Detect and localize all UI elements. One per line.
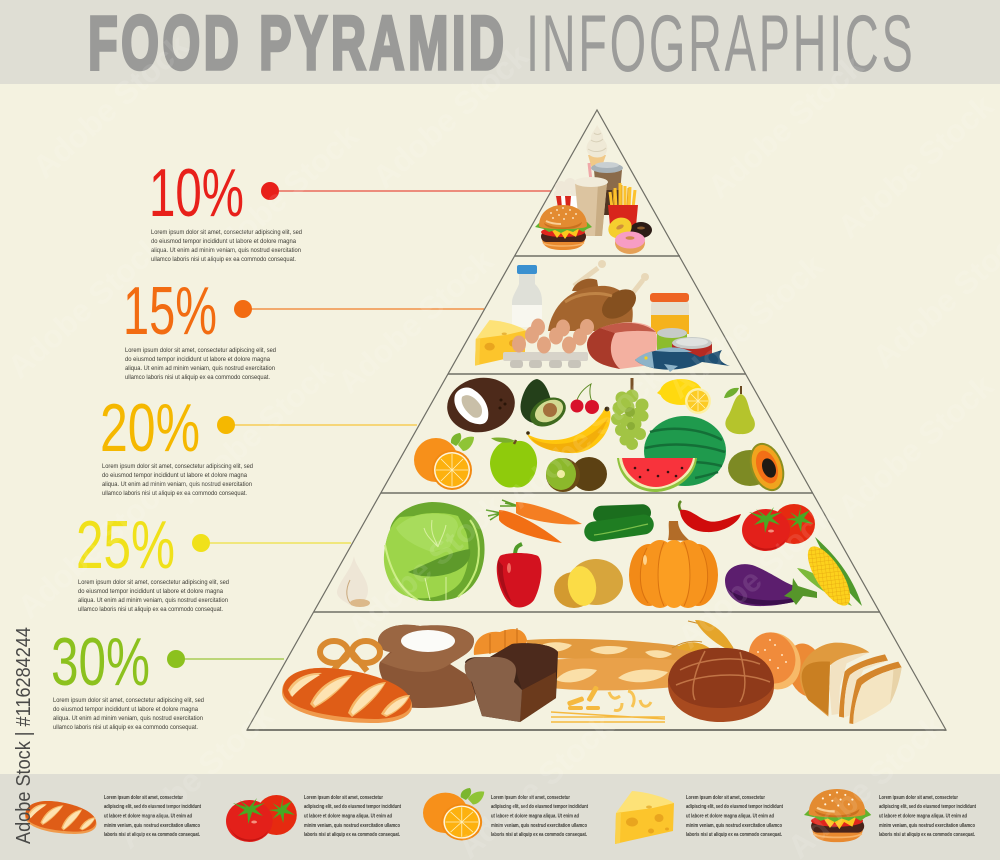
tier: grains and bread: [282, 620, 902, 724]
icon: bell pepper: [497, 544, 541, 607]
icon: garlic: [337, 556, 370, 607]
icon: jar: [650, 293, 689, 334]
label: 10 percent: Lorem ipsum dolor sit amet, consectetur adipiscing elit, sed: [151, 229, 302, 236]
infographic canvas: Adobe Stock: [366, 37, 535, 195]
tier: protein and dairy: [475, 260, 730, 372]
footer item: burger: [804, 789, 976, 842]
label: 25 percent: [76, 507, 229, 613]
infographic canvas: Adobe Stock: [26, 27, 195, 185]
icon: coffee cup: [591, 162, 623, 215]
footer item: tomatoes: minim veniam, quis nostrud exercitation ullamco: [304, 823, 400, 829]
footer item: tomatoes: Lorem ipsum dolor sit amet, consectetur: [304, 795, 383, 801]
icon: milkshake: [574, 163, 608, 236]
footer item: cheese: adipiscing elit, sed do eiusmod tempor incididunt: [686, 804, 783, 810]
infographic canvas: Adobe Stock: [111, 697, 280, 855]
icon: dark rye bread: [465, 643, 558, 722]
icon: egg tray: [503, 318, 594, 368]
footer item: orange: laboris nisi ut aliquip ex ea commodo consequat.: [491, 832, 588, 838]
label: 15 percent: do eiusmod tempor incididunt ut labore et dolore magna: [125, 356, 270, 363]
icon: cherries: [570, 384, 599, 414]
footer item: orange: [423, 788, 588, 840]
icon: ham: [587, 322, 657, 369]
footer item: tomatoes: [226, 795, 401, 842]
icon: kiwi: [546, 457, 607, 492]
icon: pear: [724, 386, 755, 434]
icon: fries: [608, 183, 638, 226]
icon: coconut: [443, 373, 519, 437]
footer item: burger: adipiscing elit, sed do eiusmod tempor incididunt: [879, 804, 976, 810]
footer item: cheese: [615, 791, 783, 844]
label: 20 percent: ullamco laboris nisi ut aliquip ex ea commodo consequat.: [102, 490, 247, 497]
icon: cheese: [475, 320, 526, 366]
title: FOOD PYRAMID: [88, 0, 504, 86]
label: 20 percent: Lorem ipsum dolor sit amet, consectetur adipiscing elit, sed: [102, 463, 253, 470]
icon: orange bread loaf: [282, 668, 412, 723]
icon: wheat: [672, 620, 735, 652]
label: 25 percent: aliqua. Ut enim ad minim veniam, quis nostrud exercitation: [78, 597, 228, 604]
footer item: tomatoes: ut labore et dolore magna aliqua. Ut enim ad: [304, 814, 392, 820]
icon: lemon: [657, 379, 711, 414]
label: 15 percent: [123, 273, 276, 381]
label: 10 percent: ullamco laboris nisi ut aliquip ex ea commodo consequat.: [151, 256, 296, 263]
label: 15 percent: Lorem ipsum dolor sit amet, consectetur adipiscing elit, sed: [125, 347, 276, 354]
footer item: cheese: Lorem ipsum dolor sit amet, consectetur: [686, 795, 765, 801]
label: 15 percent: 15%: [123, 273, 217, 349]
icon: burger: [535, 205, 592, 250]
icon: buns: [741, 625, 830, 701]
infographic canvas: Adobe Stock: [341, 487, 510, 645]
icon: orange: [414, 433, 474, 490]
leader lines: [176, 191, 551, 659]
footer item: bread: [25, 795, 201, 838]
icon: grapes: [611, 378, 648, 450]
icon: green apple: [490, 437, 537, 488]
label: 15 percent: ullamco laboris nisi ut aliquip ex ea commodo consequat.: [125, 374, 270, 381]
label: 25 percent: 25%: [76, 507, 175, 583]
stock id side text: Adobe Stock | #116284244: [13, 627, 35, 844]
icon: cabbage: [384, 502, 485, 601]
footer item: burger: minim veniam, quis nostrud exercitation ullamco: [879, 823, 975, 829]
footer item: bread: adipiscing elit, sed do eiusmod tempor incididunt: [104, 804, 201, 810]
label: 10 percent: aliqua. Ut enim ad minim veniam, quis nostrud exercitation: [151, 247, 301, 254]
infographic canvas: Adobe Stock: [331, 242, 500, 400]
label: 25 percent: ullamco laboris nisi ut aliquip ex ea commodo consequat.: [78, 606, 223, 613]
tier: fruits: [414, 373, 791, 496]
footer item: orange: minim veniam, quis nostrud exercitation ullamco: [491, 823, 587, 829]
label: 20 percent: aliqua. Ut enim ad minim veniam, quis nostrud exercitation: [102, 481, 252, 488]
infographic canvas: Adobe Stock: [171, 352, 340, 510]
infographic canvas: Adobe Stock: [831, 367, 1000, 525]
infographic canvas: Adobe Stock: [11, 467, 180, 625]
label: 20 percent: 20%: [100, 390, 200, 466]
label: 10 percent: [149, 155, 302, 263]
icon: potato: [554, 559, 623, 608]
footer item: burger: laboris nisi ut aliquip ex ea commodo consequat.: [879, 832, 976, 838]
icon: sliced bread: [800, 643, 902, 724]
tier: vegetables: [337, 500, 862, 612]
header band: [0, 0, 1000, 84]
infographic canvas: Adobe Stock: [661, 247, 830, 405]
infographic canvas: Adobe Stock: [1, 227, 170, 385]
label: 10 percent: do eiusmod tempor incididunt ut labore et dolore magna: [151, 238, 296, 245]
label: 20 percent: do eiusmod tempor incididunt ut labore et dolore magna: [102, 472, 247, 479]
icon: tomatoes: [742, 504, 815, 551]
footer item: bread: minim veniam, quis nostrud exercitation ullamco: [104, 823, 200, 829]
footer item: orange: ut labore et dolore magna aliqua. Ut enim ad: [491, 814, 579, 820]
footer item: bread: Lorem ipsum dolor sit amet, consectetur: [104, 795, 183, 801]
label: 25 percent: Lorem ipsum dolor sit amet, consectetur adipiscing elit, sed: [78, 579, 229, 586]
footer item: cheese: minim veniam, quis nostrud exercitation ullamco: [686, 823, 782, 829]
footer item: burger: Lorem ipsum dolor sit amet, consectetur: [879, 795, 958, 801]
infographic canvas: Adobe Stock: [671, 497, 840, 655]
label: 25 percent: do eiusmod tempor incididunt ut labore et dolore magna: [78, 588, 223, 595]
icon: papaya: [728, 438, 791, 496]
label: 30 percent: Lorem ipsum dolor sit amet, consectetur adipiscing elit, sed: [53, 697, 204, 704]
icon: fish: [635, 347, 730, 372]
footer item: orange: adipiscing elit, sed do eiusmod tempor incididunt: [491, 804, 588, 810]
bottom band: [0, 774, 1000, 860]
title: INFOGRAPHICS: [526, 0, 913, 89]
icon: banana: [526, 407, 611, 453]
footer item: orange: Lorem ipsum dolor sit amet, consectetur: [491, 795, 570, 801]
footer item: cheese: ut labore et dolore magna aliqua. Ut enim ad: [686, 814, 774, 820]
label: 30 percent: aliqua. Ut enim ad minim veniam, quis nostrud exercitation: [53, 715, 203, 722]
footer item: tomatoes: adipiscing elit, sed do eiusmod tempor incididunt: [304, 804, 401, 810]
label: 30 percent: do eiusmod tempor incididunt ut labore et dolore magna: [53, 706, 198, 713]
title: [88, 0, 913, 89]
infographic canvas: Adobe Stock: [831, 87, 1000, 245]
pyramid outline: [247, 110, 946, 730]
icon: flour sack: [378, 625, 475, 708]
label: 30 percent: [51, 624, 204, 731]
icon: cucumbers: [583, 504, 655, 543]
icon: roast turkey: [548, 260, 649, 331]
icon: pumpkin: [629, 521, 718, 608]
footer item: bread: laboris nisi ut aliquip ex ea commodo consequat.: [104, 832, 201, 838]
icon: watermelon: [617, 416, 726, 492]
icon: milk bottle: [512, 265, 542, 327]
icon: eggplant: [725, 564, 817, 606]
icon: croissant: [474, 628, 527, 655]
icon: corn: [797, 537, 862, 612]
icon: ice cream: [587, 125, 607, 169]
label: 30 percent: ullamco laboris nisi ut aliquip ex ea commodo consequat.: [53, 724, 198, 731]
icon: round dark bread: [668, 648, 774, 722]
icon: baguettes: [527, 639, 700, 690]
icon: cans: [657, 328, 712, 360]
label: 20 percent: [100, 390, 253, 497]
label: 30 percent: 30%: [51, 624, 150, 700]
icon: avocado: [520, 379, 571, 432]
icon: donuts: [605, 214, 652, 254]
footer item: tomatoes: laboris nisi ut aliquip ex ea commodo consequat.: [304, 832, 401, 838]
icon: pretzel: [320, 641, 380, 671]
footer item: burger: ut labore et dolore magna aliqua. Ut enim ad: [879, 814, 967, 820]
label: 15 percent: aliqua. Ut enim ad minim veniam, quis nostrud exercitation: [125, 365, 275, 372]
icon: chili pepper: [679, 501, 741, 532]
footer item: cheese: laboris nisi ut aliquip ex ea commodo consequat.: [686, 832, 783, 838]
icon: pasta: [551, 685, 665, 722]
icon: carrots: [486, 500, 582, 543]
tier: fast food and sweets: [535, 125, 652, 254]
infographic canvas: Adobe Stock: [501, 357, 670, 515]
footer item: bread: ut labore et dolore magna aliqua. Ut enim ad: [104, 814, 192, 820]
label: 10 percent: 10%: [149, 155, 244, 231]
icon: popcorn: [554, 178, 580, 208]
infographic canvas: Adobe Stock: [701, 47, 870, 205]
infographic canvas: Adobe Stock: [196, 117, 365, 275]
